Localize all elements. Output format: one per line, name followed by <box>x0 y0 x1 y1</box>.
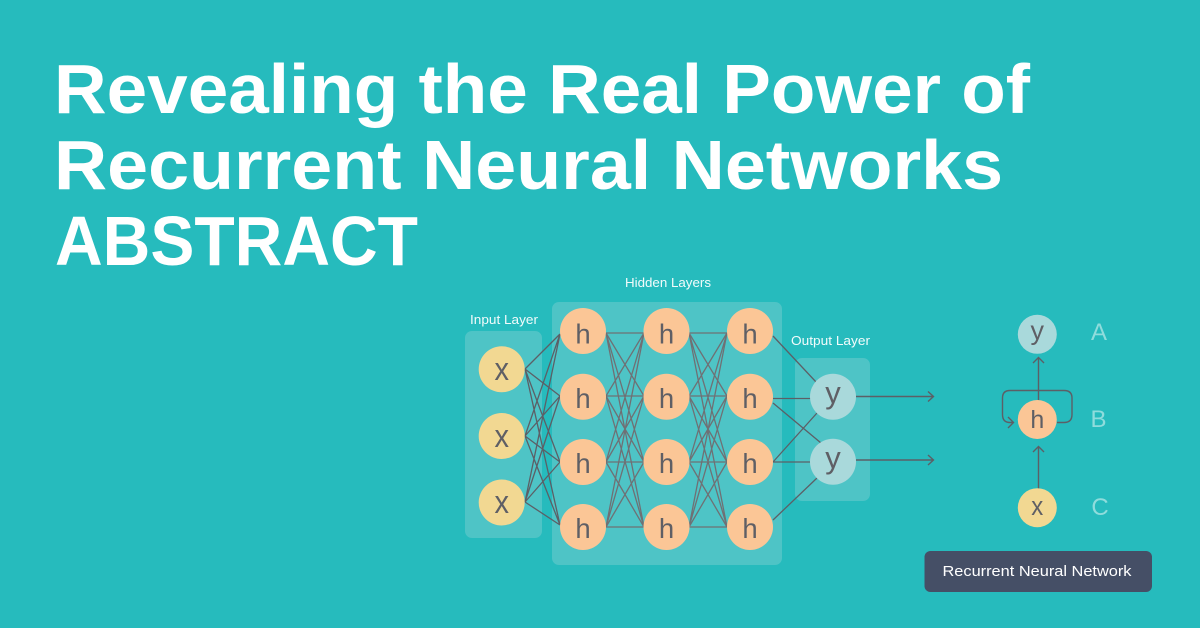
input nodes: x <box>494 484 509 520</box>
title: Revealing the Real Power of <box>54 50 1031 128</box>
panel: input layer <box>465 313 542 538</box>
connections: input to hidden <box>525 334 560 525</box>
hidden nodes: h <box>742 513 758 544</box>
panel: output layer <box>791 334 870 501</box>
caption: recurrent neural network <box>924 551 1152 592</box>
node y <box>1018 315 1057 354</box>
labels A B C: B <box>1090 406 1107 433</box>
connections: hidden to hidden <box>606 333 727 527</box>
connections: hidden to output <box>773 336 821 520</box>
node h <box>1018 400 1057 439</box>
panel: hidden layers: Hidden Layers <box>625 276 711 290</box>
input nodes: x <box>494 351 509 387</box>
node y: y <box>1031 316 1045 346</box>
node x: x <box>1031 491 1044 521</box>
output arrows <box>856 392 934 465</box>
recurrent neural network diagram <box>1002 315 1109 527</box>
title: Recurrent Neural Networks <box>54 126 1003 204</box>
hidden nodes <box>560 308 773 550</box>
labels A B C: A <box>1091 319 1107 346</box>
hidden nodes: h <box>659 383 674 414</box>
input nodes <box>479 346 525 526</box>
title <box>54 50 1031 280</box>
panel: hidden layers <box>552 276 782 565</box>
hidden nodes: h <box>742 383 758 414</box>
panel: output layer: Output Layer <box>791 334 870 348</box>
node h: h <box>1030 406 1044 434</box>
hidden nodes: h <box>575 383 591 414</box>
hidden nodes: h <box>742 318 758 350</box>
caption: recurrent neural network: Recurrent Neural Network <box>942 563 1132 580</box>
hidden nodes: h <box>742 448 758 479</box>
output nodes: y <box>825 440 841 475</box>
output nodes <box>810 374 856 485</box>
rnn arrows <box>1002 358 1072 489</box>
labels A B C: C <box>1091 494 1109 521</box>
hidden nodes: h <box>659 513 674 544</box>
labels A B C <box>1090 319 1109 521</box>
panel: input layer: Input Layer <box>470 313 538 327</box>
hidden nodes: h <box>659 448 674 479</box>
hidden nodes: h <box>575 513 591 544</box>
title: ABSTRACT <box>55 202 418 280</box>
hidden nodes: h <box>575 448 591 479</box>
neural network diagram <box>465 276 934 565</box>
input nodes: x <box>494 418 509 454</box>
hidden nodes: h <box>575 318 591 350</box>
output nodes: y <box>825 375 841 410</box>
hidden nodes: h <box>659 318 674 350</box>
node x <box>1018 488 1057 527</box>
